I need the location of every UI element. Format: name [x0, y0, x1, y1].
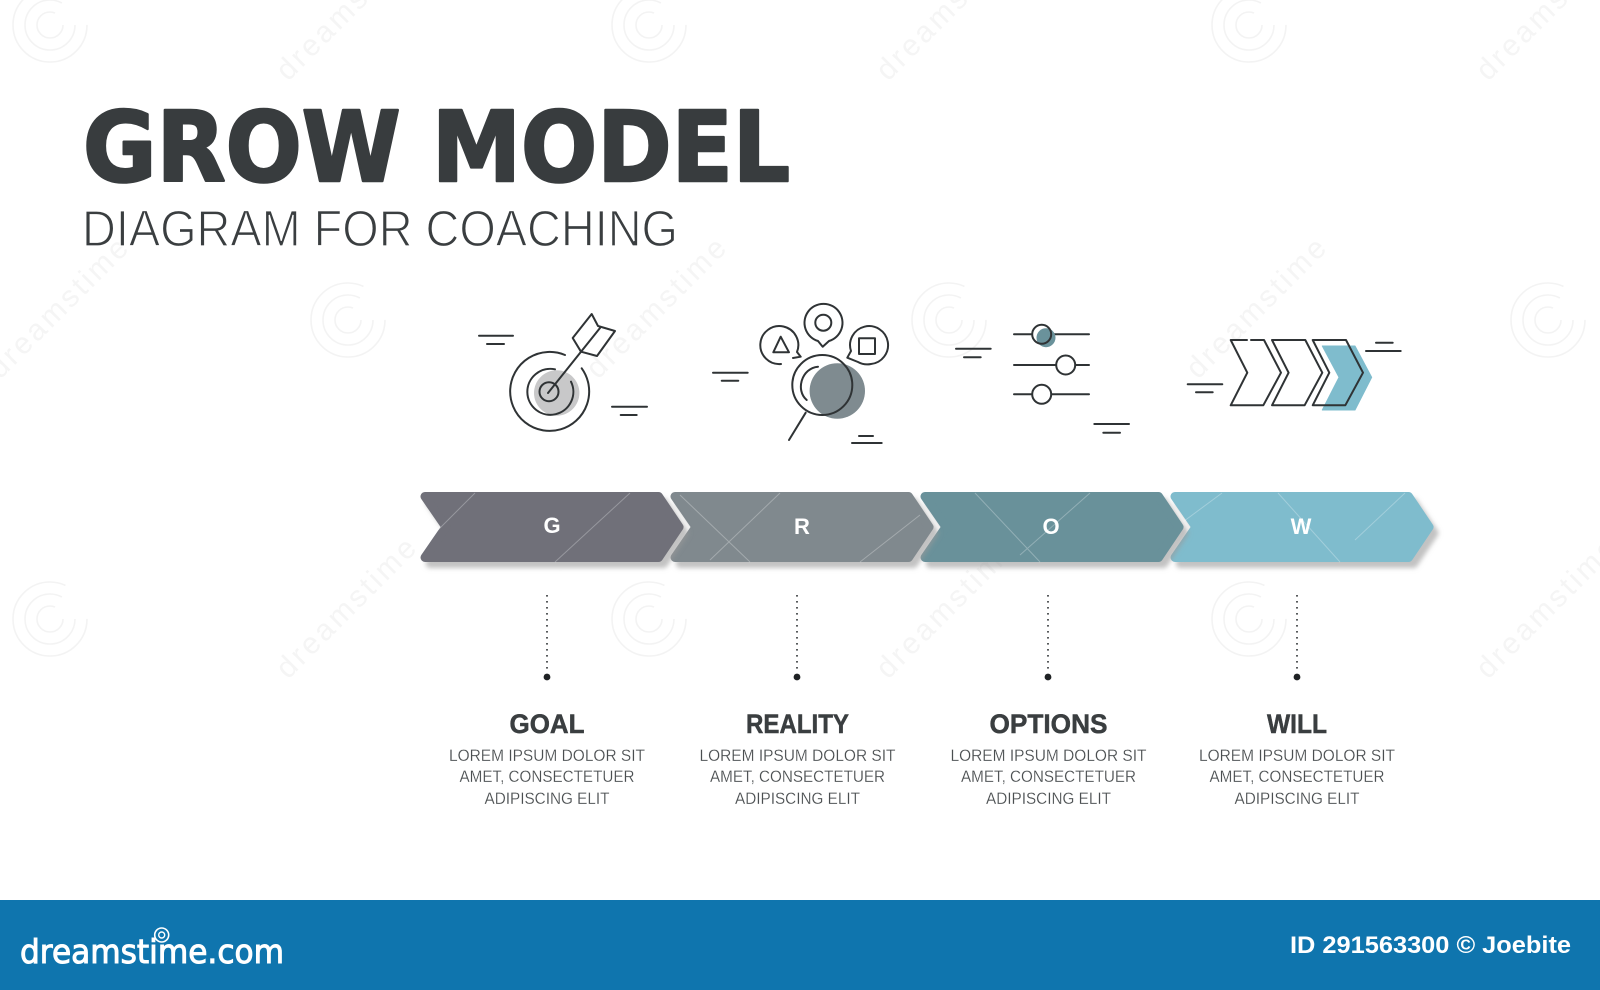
connector: goal — [544, 595, 550, 680]
footer banner — [0, 900, 1600, 990]
arrow G — [425, 493, 679, 562]
footer logo: dreamstime.com — [20, 932, 284, 971]
icon: forward chevrons — [1188, 340, 1401, 410]
arrow O — [925, 493, 1179, 562]
arrow G: G — [543, 513, 561, 538]
text block: options: ADIPISCING ELIT — [986, 789, 1111, 808]
arrow R — [675, 493, 929, 562]
text block: goal: AMET, CONSECTETUER — [460, 767, 634, 786]
icon: option sliders — [956, 325, 1129, 433]
text block: will: LOREM IPSUM DOLOR SIT — [1199, 746, 1395, 765]
arrow R: R — [794, 514, 810, 539]
text block: will: ADIPISCING ELIT — [1234, 789, 1360, 808]
footer image id: ID 291563300 © Joebite — [1290, 932, 1571, 959]
arrow W — [1172, 493, 1429, 562]
icon: magnifier with shape bubbles — [713, 304, 888, 443]
text block: will: WILL — [1267, 709, 1327, 739]
subtitle: DIAGRAM FOR COACHING — [82, 200, 678, 257]
connector: options — [1045, 595, 1051, 680]
text block: options: LOREM IPSUM DOLOR SIT — [950, 746, 1146, 765]
text block: will — [1199, 709, 1395, 808]
connector: reality — [794, 595, 800, 680]
text block: options — [950, 709, 1146, 808]
text block: options: OPTIONS — [990, 709, 1108, 739]
infographic: GROW model diagram: dreamstime — [1180, 230, 1335, 385]
title: GROW MODEL — [83, 91, 790, 204]
text block: goal: ADIPISCING ELIT — [484, 789, 610, 808]
arrow W: W — [1291, 514, 1312, 539]
connector: will — [1294, 595, 1300, 680]
text block: options: AMET, CONSECTETUER — [961, 767, 1136, 786]
infographic: GROW model diagram: dreamstime — [580, 230, 735, 385]
text block: will: AMET, CONSECTETUER — [1210, 767, 1384, 786]
text block: reality: AMET, CONSECTETUER — [710, 767, 885, 786]
text block: goal — [449, 709, 645, 808]
text block: reality — [700, 709, 896, 808]
infographic: GROW model diagram: dreamstime — [270, 530, 425, 685]
arrow O: O — [1042, 514, 1060, 539]
text block: reality: REALITY — [746, 709, 849, 739]
icon: target with dart — [479, 314, 647, 431]
text block: goal: GOAL — [510, 709, 584, 739]
text block: goal: LOREM IPSUM DOLOR SIT — [449, 746, 645, 765]
infographic: GROW model diagram: dreamstime — [870, 530, 1025, 685]
text block: reality: ADIPISCING ELIT — [735, 789, 860, 808]
text block: reality: LOREM IPSUM DOLOR SIT — [700, 746, 896, 765]
